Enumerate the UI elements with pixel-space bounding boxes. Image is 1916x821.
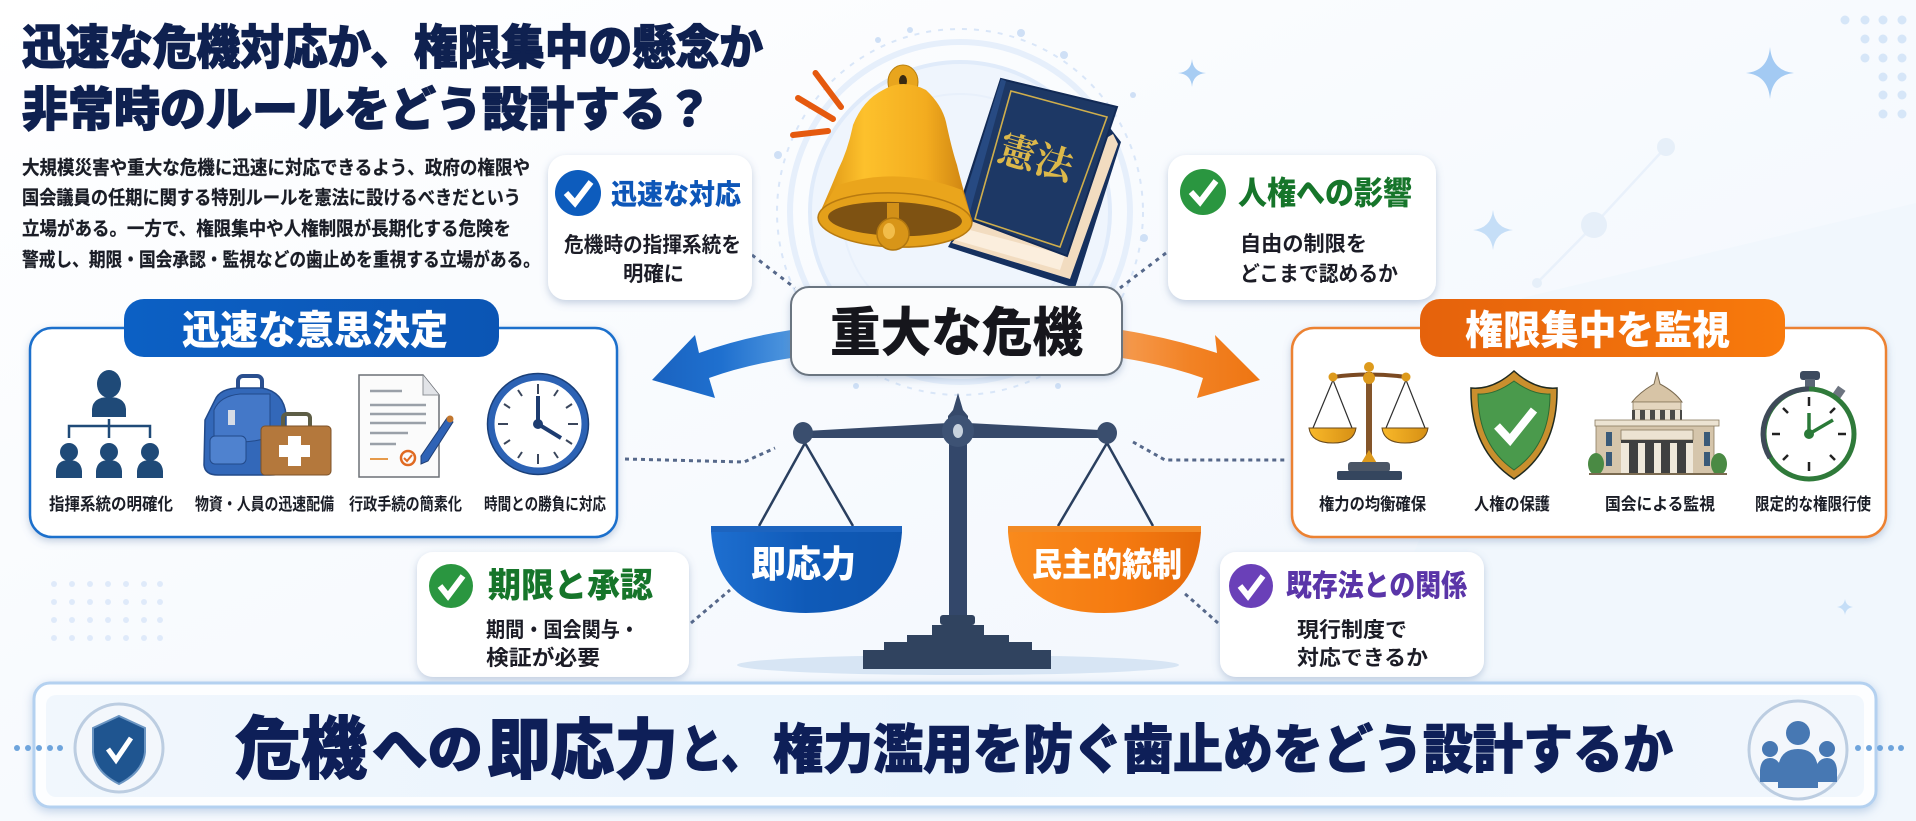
banner message: と、	[680, 722, 764, 780]
arrow: to rapid decision	[652, 330, 791, 398]
concentric rings behind bell	[774, 27, 1148, 395]
icon: stopwatch	[1763, 371, 1854, 479]
callout: human rights impact: 人権への影響	[1238, 175, 1412, 211]
scale pan: democratic control: 民主的統制	[1032, 546, 1182, 583]
title	[22, 21, 763, 136]
panel labels	[49, 494, 606, 514]
center balance scale	[711, 393, 1201, 675]
banner message	[235, 712, 1673, 788]
panel labels: 国会による監視	[1605, 495, 1715, 514]
panel labels: 物資・人員の迅速配備	[195, 495, 334, 514]
panel labels: 行政手続の簡素化	[349, 494, 462, 514]
callout: time limits and approval: 期間・国会関与・	[486, 619, 639, 642]
intro text block	[22, 156, 540, 271]
icon: backpack and first aid kit	[204, 376, 331, 475]
callout: relation to existing law: 対応できるか	[1297, 647, 1428, 670]
callout: human rights impact: どこまで認めるか	[1240, 263, 1398, 286]
scale pan: democratic control	[1008, 526, 1201, 613]
intro text block: 大規模災害や重大な危機に迅速に対応できるよう、政府の権限や	[22, 156, 530, 179]
callout: rapid response	[548, 155, 752, 300]
banner message: 権力濫用を防ぐ歯止めをどう設計するか	[773, 721, 1673, 780]
panel labels	[1319, 495, 1871, 514]
icon: paperwork	[359, 375, 454, 477]
callout: rapid response: 明確に	[623, 263, 684, 286]
heading: oversight	[1420, 299, 1785, 357]
icon: constitution book: 憲法	[993, 128, 1081, 190]
banner message: への	[372, 722, 483, 780]
title: 非常時のルールをどう設計する？	[22, 83, 712, 136]
banner message: 危機	[235, 712, 367, 788]
panel labels: 時間との勝負に対応	[484, 495, 606, 514]
panel labels: 権力の均衡確保	[1319, 495, 1426, 514]
center label: grave crisis	[791, 287, 1122, 375]
icon: alarm rays	[793, 73, 841, 135]
icon: chain of command	[56, 370, 163, 478]
scale pan: immediate response: 即応力	[751, 544, 856, 585]
intro text block: 立場がある。一方で、権限集中や人権制限が長期化する危険を	[22, 217, 511, 240]
icon: shield badge	[75, 704, 163, 792]
icon: shield	[1471, 371, 1557, 479]
icon: people badge	[1749, 701, 1847, 799]
heading: oversight: 権限集中を監視	[1465, 309, 1730, 353]
center label: grave crisis: 重大な危機	[830, 304, 1083, 363]
intro text block: 国会議員の任期に関する特別ルールを憲法に設けるべきだという	[22, 187, 521, 209]
icon: balance	[1309, 362, 1428, 480]
panel: oversight of power	[1292, 299, 1886, 537]
intro text block: 警戒し、期限・国会承認・監視などの歯止めを重視する立場がある。	[22, 248, 540, 271]
heading: rapid decision: 迅速な意思決定	[182, 309, 448, 353]
title: 迅速な危機対応か、権限集中の懸念か	[22, 21, 763, 74]
callout: human rights impact: 自由の制限を	[1240, 233, 1367, 256]
callout: human rights impact	[1168, 155, 1436, 300]
scale pan: immediate response	[711, 526, 902, 613]
panel labels: 限定的な権限行使	[1755, 495, 1871, 514]
callout: relation to existing law: 現行制度で	[1297, 619, 1407, 642]
panel: rapid decision	[30, 299, 617, 537]
icon: bell	[817, 65, 973, 250]
connector lines: top callouts	[752, 253, 1166, 288]
icon: constitution book	[948, 79, 1121, 288]
sparkles	[1178, 47, 1853, 615]
callout: time limits and approval: 検証が必要	[486, 646, 600, 670]
arrow: to oversight	[1122, 330, 1260, 398]
side dots	[14, 745, 1904, 751]
callout: rapid response: 危機時の指揮系統を	[564, 234, 741, 257]
panel labels: 指揮系統の明確化	[49, 495, 173, 514]
banner message: 即応力	[487, 713, 678, 787]
icon: clock	[488, 374, 588, 474]
bottom banner	[14, 683, 1904, 807]
icon: diet building	[1588, 372, 1727, 475]
panel labels: 人権の保護	[1474, 495, 1550, 514]
connector lines: panels and lower callouts	[625, 442, 1286, 623]
callout: rapid response: 迅速な対応	[611, 179, 741, 210]
heading: rapid decision	[124, 299, 499, 357]
callout: time limits and approval	[417, 552, 689, 677]
callout: relation to existing law	[1220, 552, 1484, 677]
callout: time limits and approval: 期限と承認	[488, 567, 653, 605]
callout: relation to existing law: 既存法との関係	[1286, 570, 1467, 603]
